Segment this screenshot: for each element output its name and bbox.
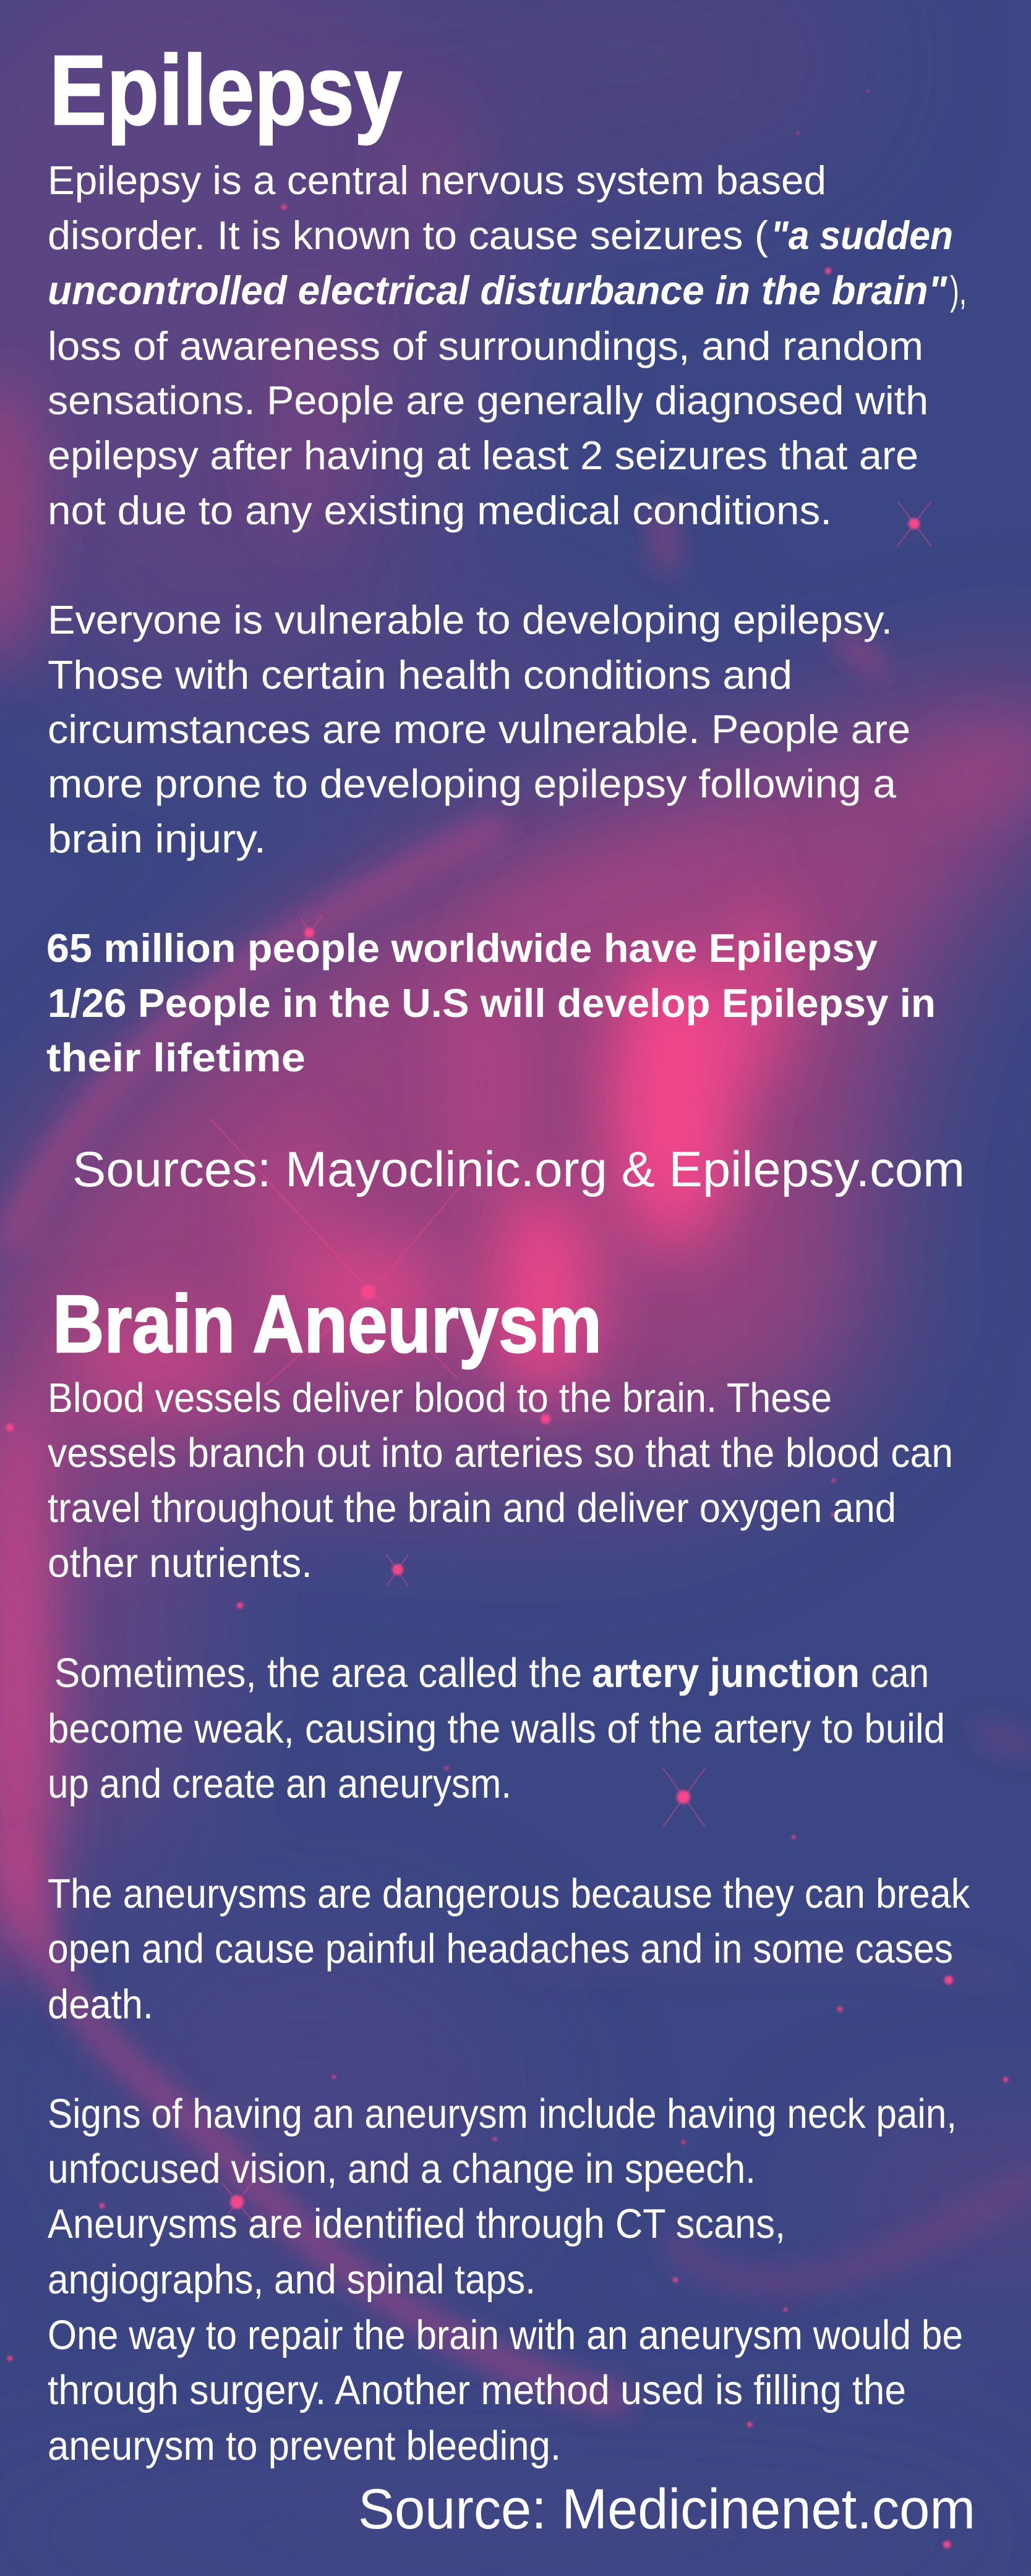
text block: artery junction: can bbox=[871, 1650, 929, 1696]
text block: signs and treatment: through surgery. Another method used is filling the bbox=[48, 2367, 906, 2413]
text block: signs and treatment: unfocused vision, and a change in speech. bbox=[48, 2146, 756, 2192]
text block: blood vessels: travel throughout the brain and deliver oxygen and bbox=[48, 1485, 896, 1531]
text block: epilepsy definition: not due to any existing medical conditions. bbox=[48, 488, 832, 533]
text block: epilepsy definition bbox=[48, 158, 967, 533]
text block: vulnerability: circumstances are more vulnerable. People are bbox=[48, 707, 910, 752]
text block: blood vessels: vessels branch out into arteries so that the blood can bbox=[48, 1430, 953, 1476]
text block: blood vessels bbox=[48, 1375, 953, 1586]
text block: epilepsy definition: uncontrolled electrical disturbance in the brain" bbox=[48, 268, 948, 313]
text block: dangers: death. bbox=[48, 1981, 153, 2028]
text block: artery junction: up and create an aneurysm. bbox=[48, 1761, 511, 1807]
text block: artery junction bbox=[48, 1650, 945, 1807]
text block: vulnerability bbox=[48, 597, 910, 861]
text block: vulnerability: Those with certain health conditions and bbox=[48, 652, 792, 697]
text block: signs and treatment: Signs of having an aneurysm include having neck pain, bbox=[48, 2091, 957, 2137]
text block: signs and treatment: Aneurysms are identified through CT scans, bbox=[48, 2201, 785, 2247]
text block: signs and treatment: One way to repair the brain with an aneurysm would be bbox=[48, 2312, 963, 2358]
text block: statistics bbox=[46, 925, 936, 1080]
text block: signs and treatment: angiographs, and spinal taps. bbox=[48, 2256, 536, 2303]
text block: epilepsy definition: "a sudden bbox=[771, 213, 953, 258]
text block: blood vessels: other nutrients. bbox=[48, 1540, 312, 1586]
text block: vulnerability: brain injury. bbox=[48, 816, 266, 861]
text block: epilepsy definition: sensations. People are generally diagnosed with bbox=[48, 378, 928, 423]
text block: epilepsy definition: epilepsy after having at least 2 seizures that are bbox=[48, 433, 918, 478]
text block: artery junction: become weak, causing the walls of the artery to build bbox=[48, 1706, 945, 1752]
text block: epilepsy definition: Epilepsy is a central nervous system based bbox=[48, 158, 826, 203]
text block: statistics: 65 million people worldwide have Epilepsy bbox=[46, 925, 878, 971]
source: Medicinenet.com: Source: Medicinenet.com bbox=[358, 2478, 975, 2541]
text block: signs and treatment: aneurysm to prevent bleeding. bbox=[48, 2423, 561, 2469]
text block: artery junction: artery junction bbox=[592, 1650, 860, 1696]
text block: dangers: open and cause painful headaches and in some cases bbox=[48, 1926, 953, 1972]
title: Brain Aneurysm: Brain Aneurysm bbox=[53, 1278, 602, 1369]
text block: vulnerability: more prone to developing epilepsy following a bbox=[48, 761, 897, 806]
text block: artery junction: Sometimes, the area called the bbox=[54, 1650, 582, 1696]
text block: epilepsy definition: disorder. It is known to cause seizures ( bbox=[48, 213, 768, 258]
text block: vulnerability: Everyone is vulnerable to developing epilepsy. bbox=[48, 597, 892, 642]
text block: dangers bbox=[48, 1871, 970, 2028]
text block: statistics: their lifetime bbox=[46, 1035, 306, 1080]
text block: statistics: 1/26 People in the U.S will develop Epilepsy in bbox=[48, 980, 936, 1026]
text block: epilepsy definition: loss of awareness of surroundings, and random bbox=[48, 323, 923, 368]
source: Mayoclinic and Epilepsy.com: Sources: Mayoclinic.org & Epilepsy.com bbox=[72, 1142, 965, 1197]
title: Epilepsy: Epilepsy bbox=[49, 35, 402, 145]
text block: blood vessels: Blood vessels deliver blood to the brain. These bbox=[48, 1375, 832, 1421]
text block: epilepsy definition: ), bbox=[950, 268, 967, 313]
text block: signs and treatment bbox=[48, 2091, 963, 2469]
